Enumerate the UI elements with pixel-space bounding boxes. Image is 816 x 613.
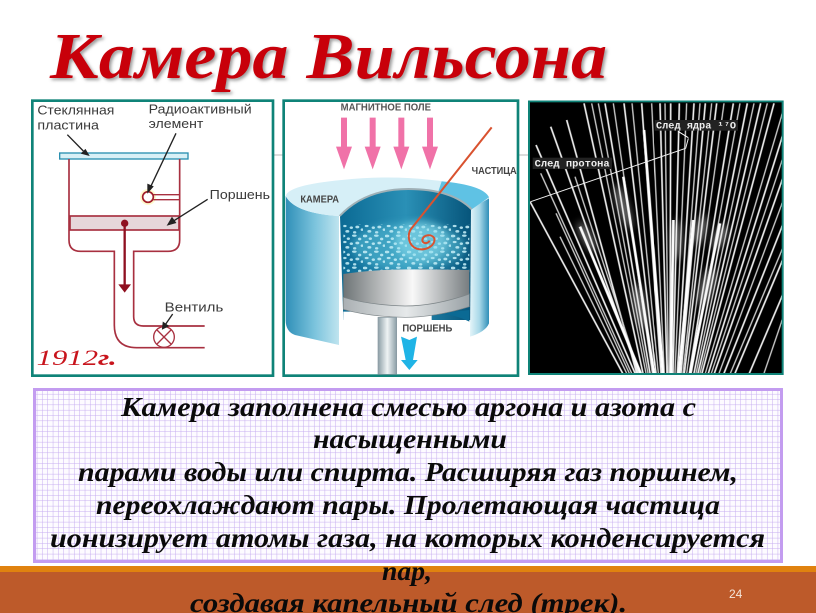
radioactive source (140, 189, 179, 205)
year label: 1912 г. (37, 345, 117, 370)
proton track line (531, 138, 688, 202)
chamber interior (340, 189, 472, 320)
valve (154, 327, 174, 347)
body text: пар, (382, 556, 432, 586)
body text: парами воды или спирта. Расширяя газ поршнем, (78, 457, 738, 487)
arrow: piston movement (118, 220, 131, 293)
inner rim edge (340, 189, 472, 216)
footer band (0, 566, 816, 613)
label: proton track: След протона (535, 158, 610, 169)
white area under piston (343, 312, 432, 343)
piston (70, 216, 179, 230)
glass plate (60, 153, 188, 159)
body text: ионизирует атомы газа, на которых конденсируется (50, 523, 765, 553)
arrows: magnetic field (336, 118, 438, 169)
panel: chamber illustration (284, 101, 518, 376)
chamber body outline (69, 159, 205, 348)
rim shading (438, 181, 489, 209)
particle tracks (530, 103, 783, 373)
panel: chamber schematic (32, 101, 273, 376)
pointer arrow (678, 131, 688, 138)
body text (50, 392, 765, 613)
body text: насыщенными (313, 424, 507, 454)
chamber right wall (470, 198, 489, 337)
particle track (409, 127, 492, 249)
label: nucleus track: След ядра ¹⁷O (656, 121, 736, 132)
body text: переохлаждают пары. Пролетающая частица (96, 490, 720, 520)
title: Камера Вильсона (51, 22, 609, 95)
label: radioactive element line 2: элемент (149, 117, 204, 131)
label: chamber: КАМЕРА (300, 195, 339, 206)
text box (34, 390, 782, 613)
frame (529, 101, 783, 374)
label: particle: ЧАСТИЦА (472, 166, 517, 177)
page number: 24 (729, 587, 743, 601)
label: glass plate: Стеклянная (37, 104, 114, 118)
piston plate (343, 269, 469, 317)
dark interior under plate (432, 310, 469, 322)
label: magnetic field: МАГНИТНОЕ ПОЛЕ (341, 103, 431, 114)
arrow: piston direction (401, 337, 418, 370)
panel: track photograph (528, 101, 783, 375)
pointer arrows (67, 133, 208, 329)
title: Камера Вильсона (49, 20, 607, 93)
label: glass plate line 2: пластина (37, 118, 100, 132)
label: radioactive element: Радиоактивный (149, 102, 252, 116)
label: valve: Вентиль (165, 300, 224, 314)
label: piston: Поршень (210, 188, 270, 202)
body text: Камера заполнена смесью аргона и азота с (120, 392, 696, 422)
label: piston: ПОРШЕНЬ (402, 323, 452, 334)
chamber rim (286, 177, 489, 216)
piston rod (378, 317, 397, 374)
chamber left wall (286, 196, 339, 345)
